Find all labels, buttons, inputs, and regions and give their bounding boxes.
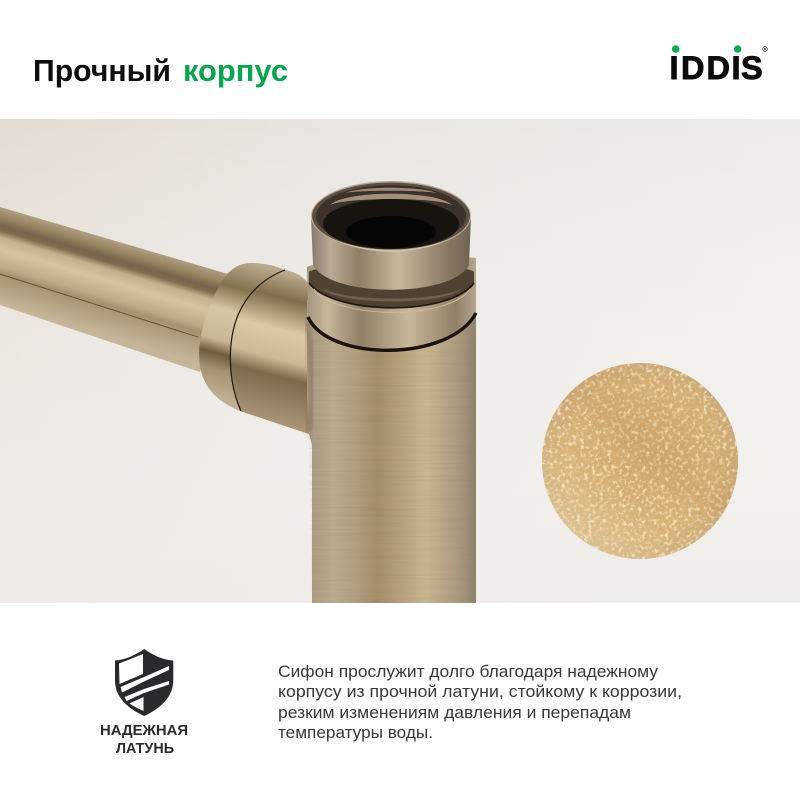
description text: температуры воды.: [278, 723, 433, 742]
title: корпус: [183, 53, 288, 88]
title: Прочный: [33, 53, 171, 88]
top ring: [311, 181, 471, 290]
product photo panel: [0, 119, 800, 603]
siphon collar and elbow: [199, 263, 316, 434]
title: [33, 53, 288, 88]
ring opening: [312, 182, 470, 250]
dark neck: [309, 264, 474, 312]
siphon pipe: [0, 207, 228, 372]
icon: shield: [115, 649, 173, 716]
siphon body: [306, 300, 477, 603]
description text: резким изменениям давления и перепадам: [278, 703, 631, 722]
description text: [278, 662, 682, 742]
description text: корпусу из прочной латуни, стойкому к коррозии,: [278, 682, 682, 701]
icon caption: НАДЕЖНАЯ: [100, 723, 188, 739]
description text: Сифон прослужит долго благодаря надежному: [278, 662, 659, 681]
logo: IDDIS: IDDIS: [670, 50, 763, 86]
brass sphere: [542, 363, 738, 559]
lower ring and groove: [307, 257, 476, 350]
icon caption: [100, 723, 188, 757]
icon caption: ЛАТУНЬ: [116, 741, 174, 757]
